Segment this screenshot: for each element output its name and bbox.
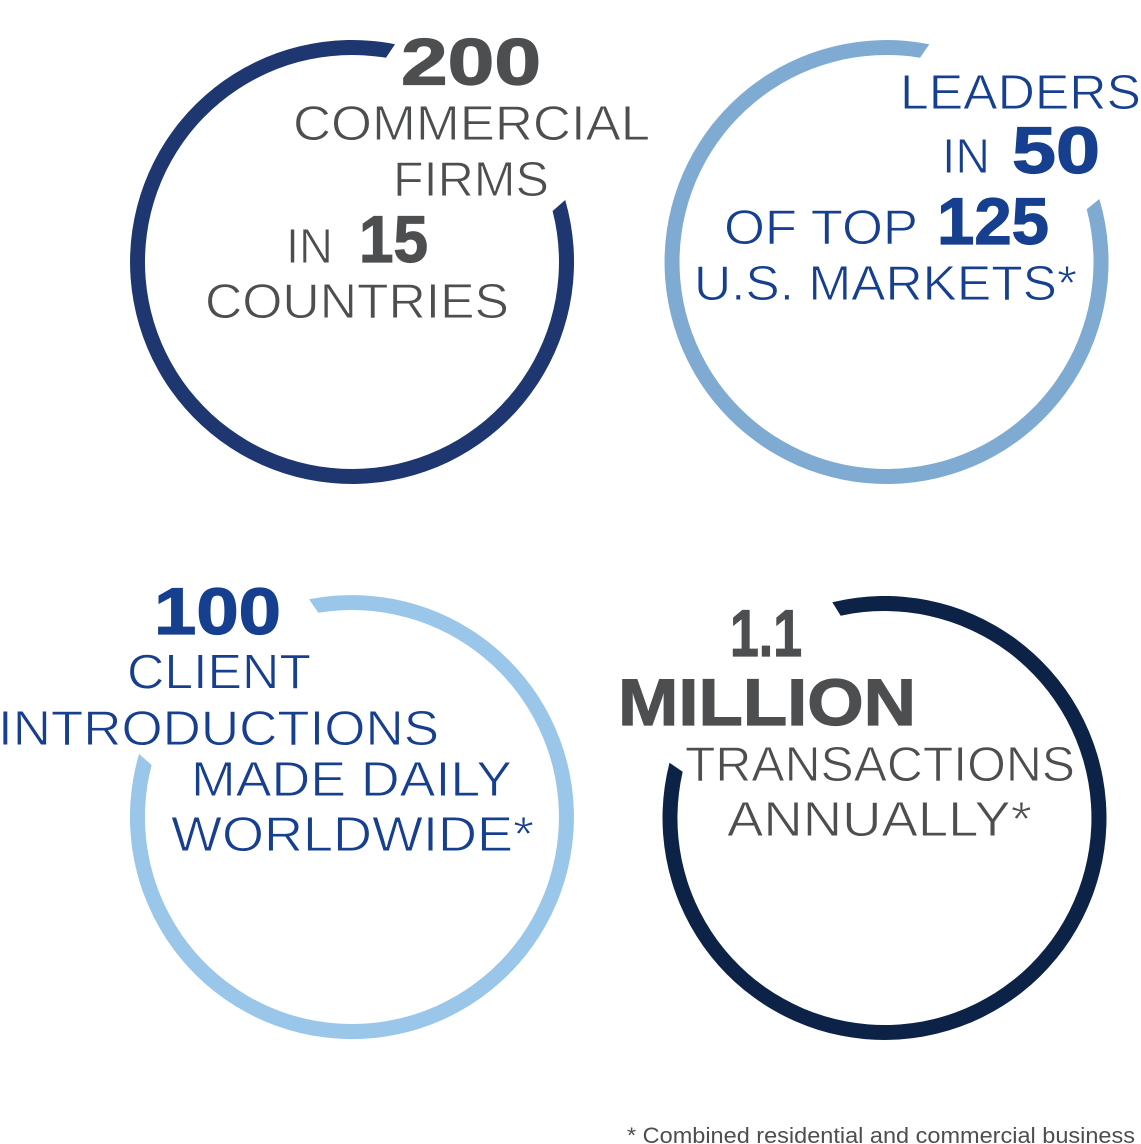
ring: light blue	[130, 595, 574, 1039]
ring: dark blue	[130, 40, 574, 484]
text: leaders in 50 of top 125 U.S. markets: 125	[937, 184, 1049, 258]
text: 100 client introductions made daily worldwide: INTRODUCTIONS	[0, 702, 439, 756]
text: 200 commercial firms in 15 countries: FIRMS	[393, 153, 549, 207]
text: 1.1 million transactions annually: 1.1	[730, 596, 802, 670]
text: 1.1 million transactions annually: TRANSACTIONS	[685, 738, 1075, 792]
text: 100 client introductions made daily worldwide: 100	[154, 574, 281, 648]
text: 1.1 million transactions annually	[618, 596, 1075, 847]
text: leaders in 50 of top 125 U.S. markets: IN	[942, 130, 990, 184]
panel: commercial firms	[130, 24, 650, 484]
text: 200 commercial firms in 15 countries	[205, 24, 650, 329]
text: 1.1 million transactions annually: MILLION	[618, 665, 916, 739]
ring: navy	[663, 596, 1107, 1040]
text: 100 client introductions made daily worldwide: WORLDWIDE*	[171, 808, 534, 862]
text: 200 commercial firms in 15 countries: COMMERCIAL	[293, 97, 650, 151]
text: 200 commercial firms in 15 countries: COUNTRIES	[205, 275, 509, 329]
panel: transactions	[618, 596, 1107, 1040]
text: 100 client introductions made daily worldwide: MADE DAILY	[191, 753, 512, 807]
text: leaders in 50 of top 125 U.S. markets: 50	[1012, 113, 1100, 187]
text: 1.1 million transactions annually: ANNUALLY*	[727, 793, 1032, 847]
text: leaders in 50 of top 125 U.S. markets	[694, 66, 1141, 311]
text: leaders in 50 of top 125 U.S. markets: LEADERS	[900, 66, 1141, 120]
ring: medium blue	[665, 40, 1109, 484]
text: 200 commercial firms in 15 countries: IN	[286, 220, 333, 274]
text: leaders in 50 of top 125 U.S. markets: U.S. MARKETS*	[694, 257, 1077, 311]
text: 100 client introductions made daily worldwide: CLIENT	[127, 646, 311, 700]
text: 100 client introductions made daily worldwide	[0, 574, 534, 862]
panel: client introductions	[0, 574, 574, 1039]
text: 200 commercial firms in 15 countries: 200	[401, 24, 541, 98]
text: leaders in 50 of top 125 U.S. markets: OF TOP	[724, 201, 918, 255]
panel: market leaders	[665, 40, 1141, 484]
text: 200 commercial firms in 15 countries: 15	[359, 202, 428, 276]
